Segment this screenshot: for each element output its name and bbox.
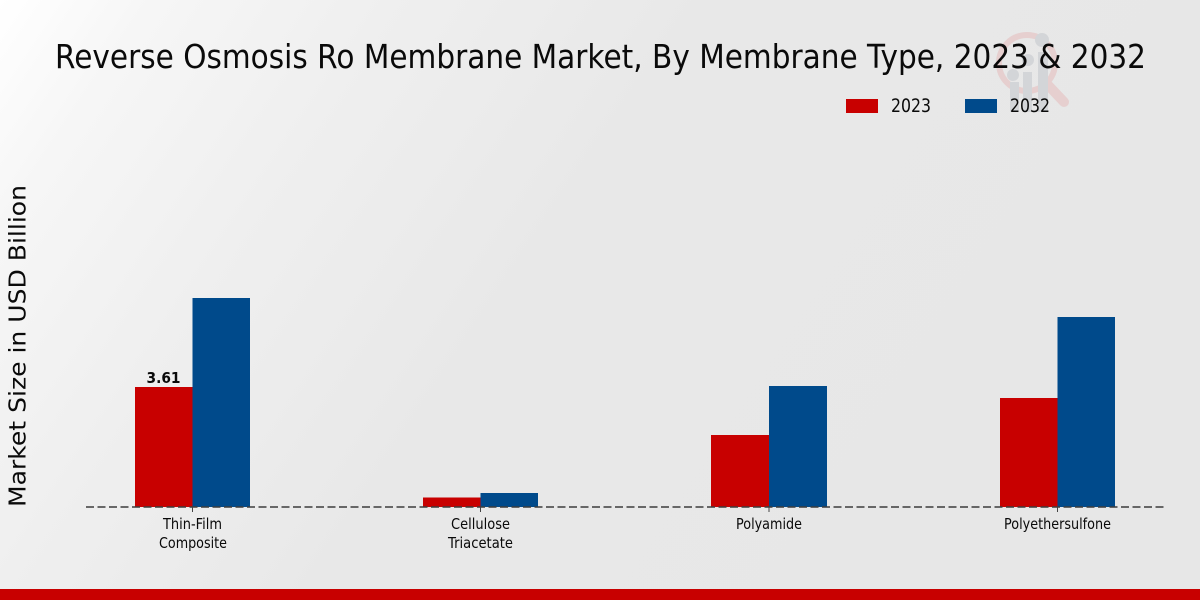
footer bar <box>0 589 1200 600</box>
x-axis label: Cellulose Triacetate <box>447 515 513 552</box>
icon: watermark magnifier with bars <box>999 33 1064 112</box>
legend <box>846 95 1050 117</box>
bar chart <box>86 298 1164 512</box>
x-axis label: Thin-Film Composite <box>159 515 227 552</box>
x-axis label: Thin-Film Composite: Composite <box>159 534 227 552</box>
bars: Cellulose Triacetate <box>423 493 538 507</box>
x-axis baseline <box>86 506 1164 508</box>
y-axis label: Market Size in USD Billion <box>6 185 32 507</box>
bars: Thin-Film Composite <box>135 298 250 507</box>
legend item: 2032: 2032 <box>1010 95 1050 117</box>
x-axis label: Thin-Film Composite: Thin-Film <box>162 515 222 533</box>
legend item: 2023: 2023 <box>891 95 931 117</box>
data label: 3.61: 3.61 <box>146 369 180 387</box>
legend item: 2023 <box>846 95 931 117</box>
bars: Polyamide <box>711 386 827 507</box>
x-axis label: Polyamide: Polyamide <box>736 515 802 533</box>
bars: Polyethersulfone <box>1000 317 1115 507</box>
legend item: 2032 <box>965 95 1050 117</box>
x-axis label: Cellulose Triacetate: Cellulose <box>451 515 510 533</box>
x-axis label: Cellulose Triacetate: Triacetate <box>447 534 513 552</box>
x-axis label: Polyethersulfone: Polyethersulfone <box>1004 515 1111 533</box>
